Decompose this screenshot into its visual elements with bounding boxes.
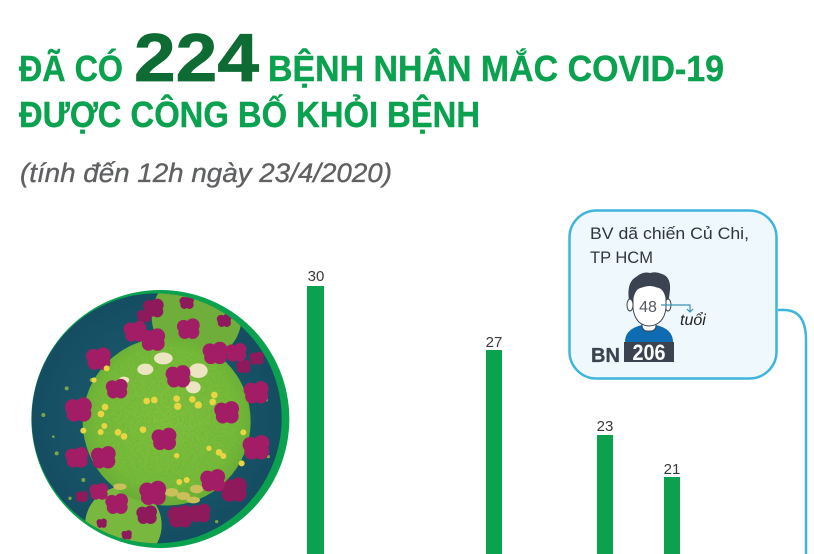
subtitle: date: (tính đến 12h ngày 23/4/2020): [20, 158, 392, 188]
callout text: hospital: TP HCM: [590, 249, 653, 267]
callout text: hospital: BV dã chiến Củ Chi,: [590, 225, 749, 243]
virus illustration in green ring: [31, 272, 289, 554]
age unit: tuổi: [680, 311, 706, 329]
label BN: BN: [591, 345, 620, 367]
bar: 30: [307, 268, 324, 554]
icon: patient: [624, 272, 674, 365]
icon: patient: 48: [639, 299, 657, 316]
bar: 23: [597, 418, 613, 554]
title: 224: [134, 20, 259, 96]
icon: patient: 206: [632, 340, 666, 365]
bar: 21: [664, 461, 680, 554]
bar: 21: 21: [664, 461, 680, 478]
bar: 27: [486, 334, 502, 554]
title: [19, 20, 724, 135]
title: ĐƯỢC CÔNG BỐ KHỎI BỆNH: [19, 93, 480, 135]
age arrow: [661, 305, 693, 312]
callout: patient 206: [570, 210, 776, 378]
title: ĐÃ CÓ: [19, 47, 123, 89]
title: BỆNH NHÂN MẮC COVID-19: [268, 47, 724, 89]
bar: 30: 30: [308, 268, 324, 285]
bar chart: [307, 268, 680, 554]
connector line: [778, 310, 806, 554]
bar: 27: 27: [486, 334, 502, 351]
bar: 23: 23: [597, 418, 613, 435]
